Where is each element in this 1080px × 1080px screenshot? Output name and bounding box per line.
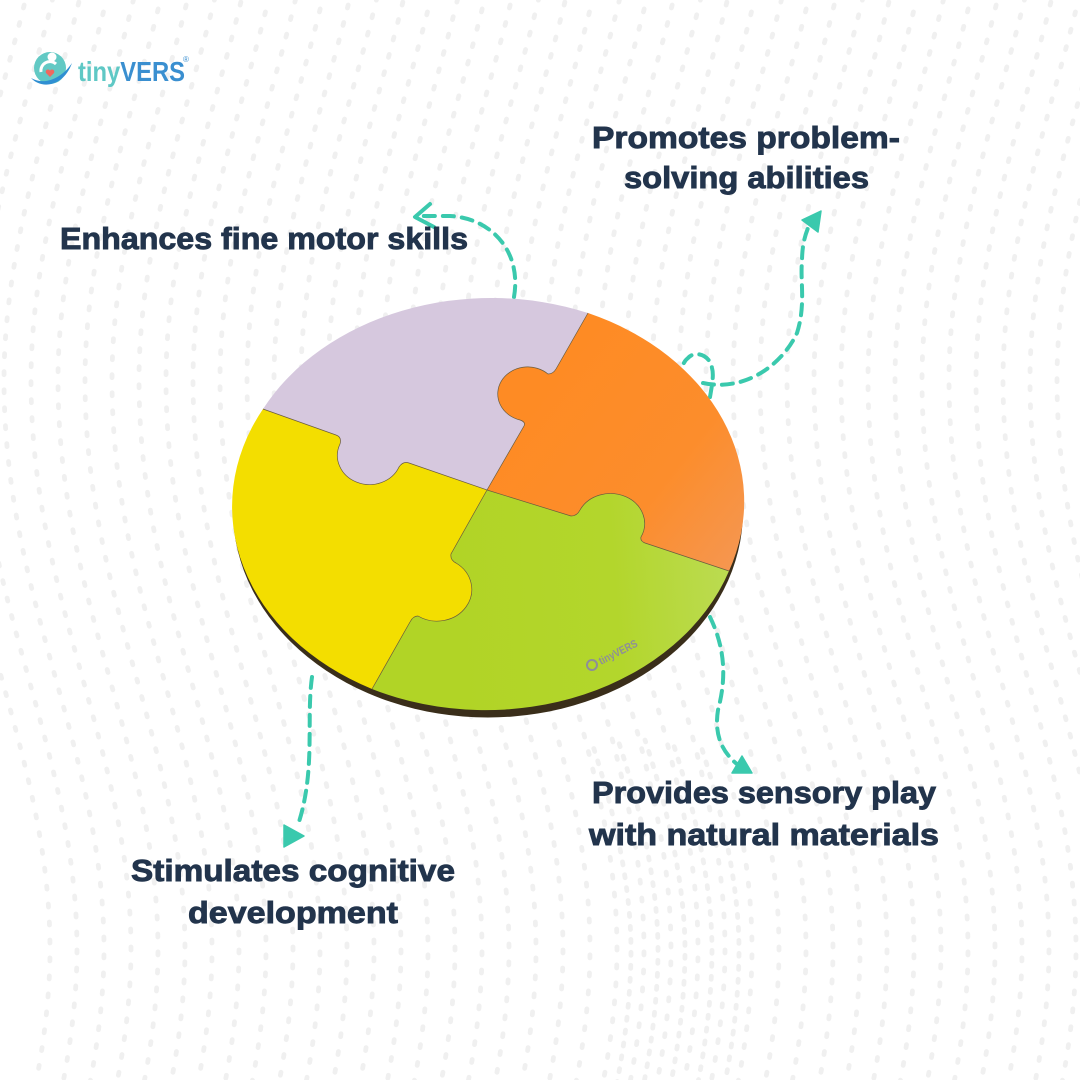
puzzle piece: lilac	[263, 298, 588, 490]
arrow: to sensory play	[710, 617, 752, 773]
puzzle piece: green	[372, 490, 729, 710]
brand name: tinyVERS	[597, 638, 640, 668]
label: sensory play: with natural materials	[588, 817, 939, 852]
brand mark on puzzle	[585, 638, 640, 674]
label: sensory play	[588, 775, 939, 852]
arrow: to fine motor skills	[415, 204, 515, 297]
label: problem solving: solving abilities	[624, 160, 869, 195]
brand icon	[585, 658, 599, 672]
label: cognitive development: development	[188, 895, 398, 930]
puzzle piece: yellow	[232, 409, 487, 689]
arrow: to cognitive development	[284, 677, 312, 847]
label: sensory play: Provides sensory play	[592, 775, 937, 810]
logo wordmark: tinyVERS	[78, 56, 185, 87]
label: fine motor skills: Enhances fine motor skills	[60, 221, 468, 256]
registered mark: ®	[183, 55, 189, 64]
logo: tinyvers	[31, 52, 189, 87]
label: problem solving: Promotes problem-	[592, 120, 900, 155]
puzzle disc	[232, 298, 744, 718]
arrow: to problem solving	[683, 211, 821, 397]
icon: globe with heart	[31, 52, 72, 85]
label: problem solving	[592, 120, 900, 195]
label: cognitive development	[131, 853, 455, 930]
puzzle seams	[263, 313, 729, 689]
disc side thickness	[233, 304, 743, 718]
label: cognitive development: Stimulates cognitive	[131, 853, 455, 888]
puzzle piece: orange	[487, 313, 744, 571]
